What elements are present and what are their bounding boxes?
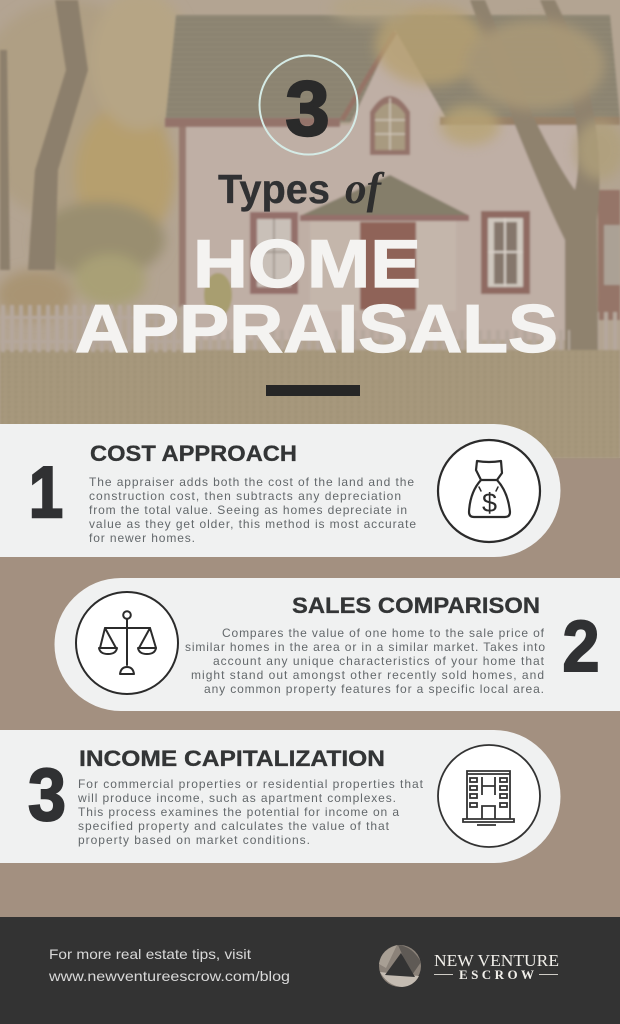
body text: specified property and calculates the value of that [78,819,390,833]
body text: any common property features for a specific local area. [204,682,544,696]
bush near door [204,273,232,317]
left tree [0,0,88,270]
logo mark [379,945,421,987]
heading: SALES COMPARISON [292,593,540,618]
body text: account any unique characteristics of your home that [213,654,545,668]
logo wordmark [434,951,559,982]
number 3: 3 [28,753,66,836]
logo wordmark: NEW VENTURE [434,951,559,970]
ground [0,350,620,458]
body text [185,626,545,696]
title: number 3 in circle [260,56,358,154]
title: Types of [218,164,385,213]
right window [481,211,530,294]
body text: might stand out amongst other recently sold homes, and [191,668,544,682]
wall [183,125,578,340]
body text [89,475,416,545]
title: Types of: of [345,164,385,213]
icon: money bag: $ [482,488,497,518]
title: Types of: Types [218,166,330,212]
body text: property based on market conditions. [78,833,310,847]
footer bar [0,917,620,1024]
body text: for newer homes. [89,531,195,545]
heading: COST APPROACH [90,441,297,466]
footer text [48,946,290,984]
title: number 3 in circle: 3 [286,66,330,152]
body text [77,777,424,847]
title: HOME APPRAISALS: HOME [193,226,421,302]
panel 1: cost approach [0,424,560,557]
title: HOME APPRAISALS [75,226,558,367]
body text: For commercial properties or residential properties that [78,777,424,791]
body text: construction cost, then subtracts any depreciation [89,489,401,503]
left window [250,212,298,294]
title divider bar [266,385,360,396]
footer text: For more real estate tips, visit [49,946,251,962]
background photo: house with autumn trees [0,0,620,458]
right tree [470,0,599,350]
footer text: www.newventureescrow.com/blog [48,968,290,984]
body text: will produce income, such as apartment complexes. [77,791,396,805]
body text: This process examines the potential for income on a [78,805,399,819]
eave [165,118,340,127]
number 1: 1 [29,453,63,533]
porch [310,221,456,311]
logo: New Venture Escrow [379,945,559,987]
arched window [370,96,410,155]
panel 3: income capitalization [0,730,560,863]
heading: INCOME CAPITALIZATION [79,746,385,771]
icon: balance scale [76,592,178,694]
fence [0,305,185,352]
porch roof [302,175,468,215]
icon: money bag [438,440,540,542]
body text: Compares the value of one home to the sale price of [222,626,545,640]
icon: apartment building [438,745,540,847]
right side house edge [598,190,620,320]
body text: from the total value. Seeing as homes depreciate in [89,503,407,517]
body text: similar homes in the area or in a similar market. Takes into [185,640,545,654]
gable [350,30,450,125]
title: HOME APPRAISALS: APPRAISALS [75,291,558,367]
logo wordmark: ESCROW [459,967,534,982]
body text: The appraiser adds both the cost of the land and the [89,475,414,489]
panel 2: sales comparison [55,578,620,711]
number 2: 2 [562,607,600,687]
roof [165,15,620,125]
body text: value as they get older, this method is most accurate [89,517,416,531]
